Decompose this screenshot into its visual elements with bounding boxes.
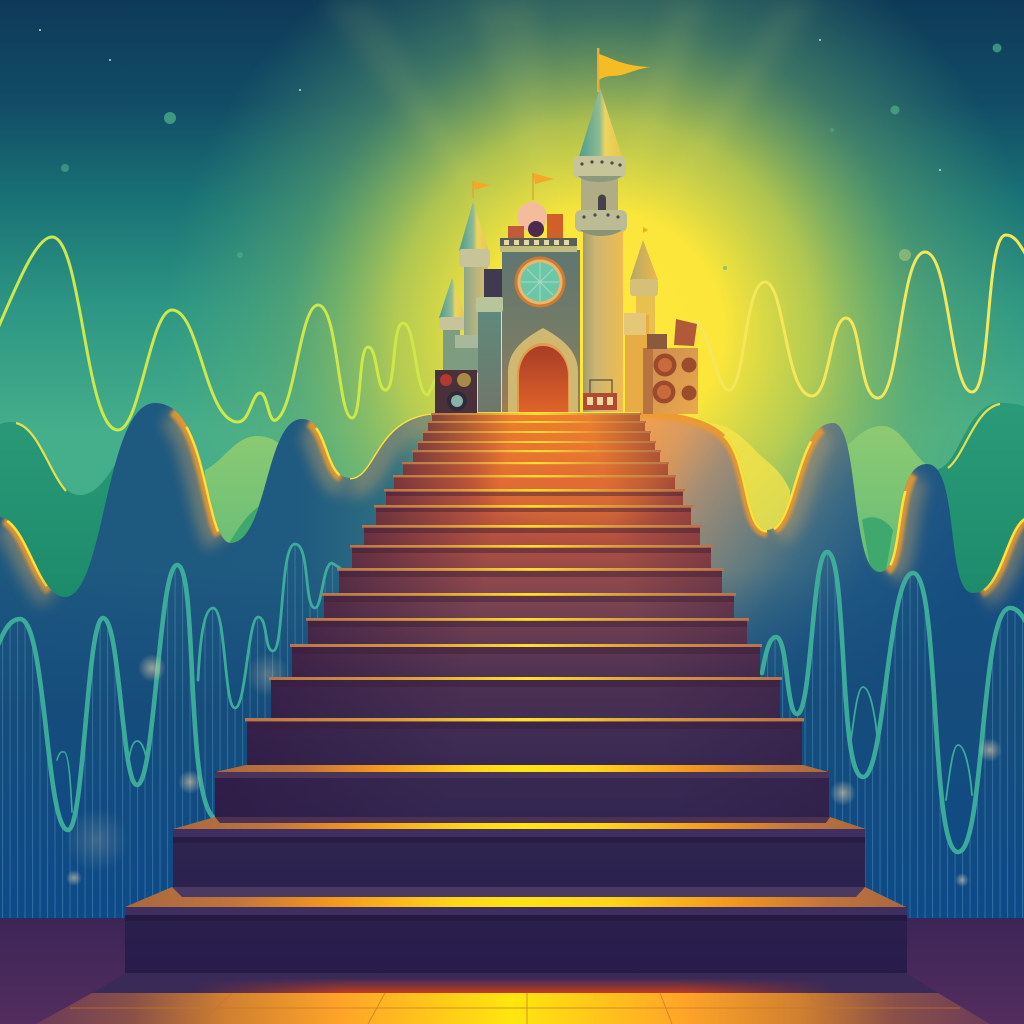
glowing floor tiles [36,993,990,1024]
staircase [125,413,907,973]
bokeh lights [65,653,1002,887]
back hill: far left [0,422,115,620]
boombox at door [583,380,617,410]
tower: right small [630,240,658,365]
small boxes on right speaker [647,319,697,349]
stair nosing highlights [245,413,804,721]
lower dark-blue band [0,570,1024,918]
speaker: left [435,370,477,413]
back hill: small centre right [862,517,893,578]
back hill: far right [935,403,1024,620]
floor [0,918,1024,1024]
upper stair risers [215,413,829,818]
shadow band under each nosing [247,492,802,729]
short front tower [476,269,503,412]
vertical sound lines [0,540,1024,918]
tile joints [70,993,960,1024]
back hill: yellow bump near castle [690,423,790,545]
rim lighting on hills [0,403,1024,918]
main tall tower [573,88,627,412]
blue front hills: left [0,403,440,918]
castle [435,48,698,414]
base plate of stairs [92,973,938,993]
tower: left tall [455,202,490,373]
back hills [0,403,1024,620]
back hill: centre right [848,426,935,600]
back hill highlights [16,404,1000,491]
step: third from bottom [173,817,866,887]
upper sound wave: right [695,235,1024,398]
upper sound wave: left [0,237,440,430]
lower green sound wave: right [762,552,1024,852]
back hill: centre left [205,436,285,560]
roof dome and ornaments [508,202,563,238]
light rays [320,0,820,300]
back hill: small centre left [228,503,270,560]
warm glow on upper risers [480,430,670,526]
golden glow behind the castle [0,0,1024,800]
blue front hills: right [640,410,1024,918]
crenellated block: right [624,313,649,412]
lower green sound wave: left [0,544,340,830]
step: fourth from bottom tread [215,765,829,778]
wide soft rim glow [0,403,1024,597]
central keep [500,238,580,412]
flag: main tower [597,48,650,92]
step: second from bottom [125,887,907,973]
yellow rim [0,403,1024,597]
purple floor [0,918,1024,1024]
tower: far left small [439,278,466,372]
arched door [508,328,578,412]
stair edge shading [215,413,829,818]
orange rim [0,403,1024,597]
flags: small towers [473,173,648,233]
stars and sky particles [39,29,1002,270]
clock window [514,256,566,308]
speaker: right [643,348,698,414]
